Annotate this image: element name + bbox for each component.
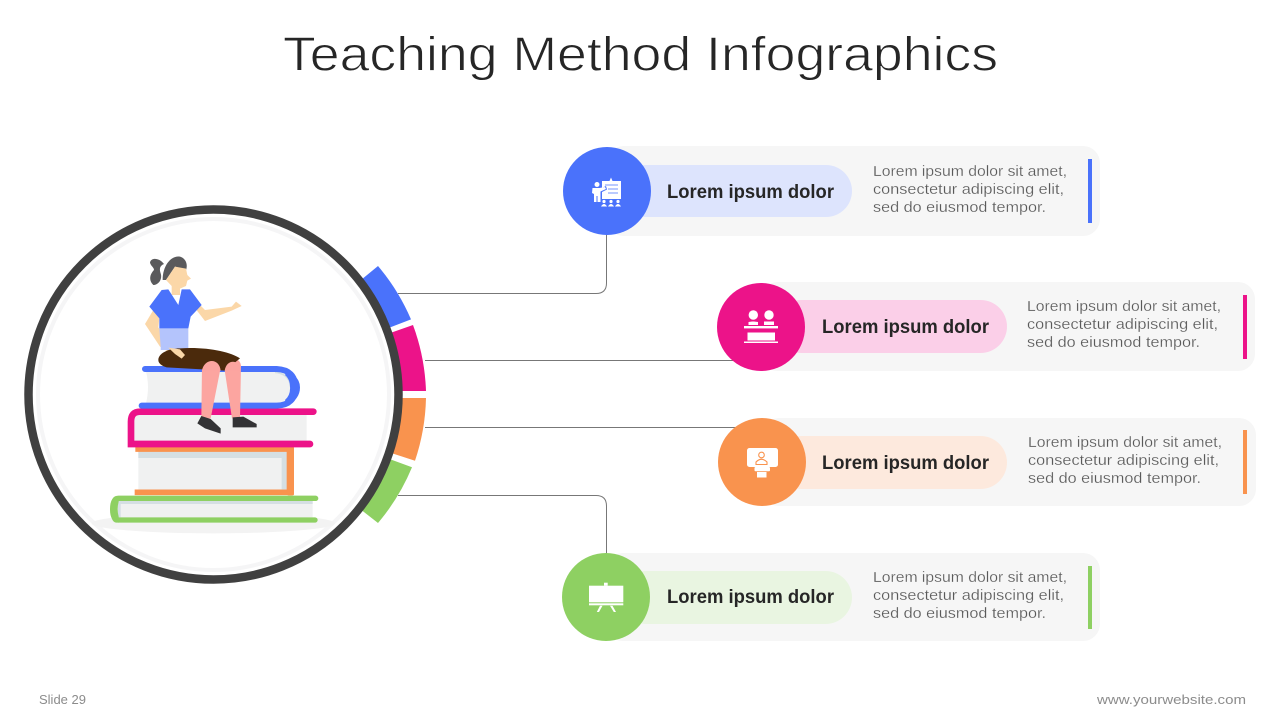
footer: slide number: Slide 29: [39, 693, 86, 707]
description 4: sed do eiusmod tempor.: [873, 605, 1046, 622]
footer: website: www.yourwebsite.com: [1096, 693, 1246, 707]
shoes: [197, 416, 257, 434]
skirt: [158, 348, 240, 371]
pill 2: [775, 300, 1007, 353]
description 2: consectetur adipiscing elit,: [1027, 316, 1218, 333]
label 1: Lorem ipsum dolor: [667, 182, 835, 203]
accent bar 3: [1243, 430, 1247, 494]
description 1: [873, 163, 1067, 216]
book: green: [111, 496, 316, 523]
book: blue: [142, 369, 300, 406]
ground shadow: [92, 513, 335, 533]
circle 4: [562, 553, 650, 641]
description 1: consectetur adipiscing elit,: [873, 181, 1064, 198]
illustration: woman on books: [92, 256, 335, 533]
main circle: [28, 210, 398, 580]
card 4: [606, 553, 1100, 641]
shirt: [149, 289, 202, 328]
description 2: sed do eiusmod tempor.: [1027, 334, 1200, 351]
circle 2: [717, 283, 805, 371]
pill 4: [620, 571, 852, 624]
description 3: consectetur adipiscing elit,: [1028, 452, 1219, 469]
book: magenta: [131, 412, 313, 444]
description 3: sed do eiusmod tempor.: [1028, 470, 1201, 487]
far arm: [145, 310, 173, 354]
hand: [168, 348, 185, 359]
segmented arc: [355, 266, 426, 523]
card 2: [761, 282, 1255, 371]
description 2: Lorem ipsum dolor sit amet,: [1027, 298, 1221, 315]
description 1: Lorem ipsum dolor sit amet,: [873, 163, 1067, 180]
book: orange: [135, 447, 294, 495]
icon: presenter at board: [592, 178, 621, 206]
description 1: sed do eiusmod tempor.: [873, 199, 1046, 216]
label 2: Lorem ipsum dolor: [822, 317, 990, 338]
icon: two speakers at desk: [744, 310, 778, 343]
upper body: [145, 256, 242, 371]
knees: [202, 361, 241, 371]
waist: [159, 328, 188, 350]
hair: [150, 256, 187, 285]
pill 1: [620, 165, 852, 217]
icon: lecturer at podium: [747, 448, 778, 478]
title: Teaching Method Infographics: [283, 28, 998, 82]
circle 1: [563, 147, 651, 235]
connector lines: [398, 232, 740, 556]
near arm: [196, 302, 242, 321]
description 4: consectetur adipiscing elit,: [873, 587, 1064, 604]
description 4: Lorem ipsum dolor sit amet,: [873, 569, 1067, 586]
label 4: Lorem ipsum dolor: [667, 587, 835, 608]
description 3: Lorem ipsum dolor sit amet,: [1028, 434, 1222, 451]
icon: presentation board: [589, 583, 623, 612]
pill 3: [775, 436, 1007, 489]
circle 3: [718, 418, 806, 506]
description 2: [1027, 298, 1221, 351]
description 3: [1028, 434, 1222, 487]
item 3: [718, 418, 1256, 506]
item 2: [717, 282, 1255, 371]
item 4: [562, 553, 1100, 641]
accent bar 1: [1088, 159, 1092, 223]
legs: [201, 359, 241, 418]
item 1: [563, 146, 1100, 236]
card 1: [607, 146, 1100, 236]
accent bar 2: [1243, 295, 1247, 359]
description 4: [873, 569, 1067, 622]
card 3: [762, 418, 1256, 506]
face and neck: [166, 267, 191, 295]
accent bar 4: [1088, 566, 1092, 629]
label 3: Lorem ipsum dolor: [822, 453, 990, 474]
